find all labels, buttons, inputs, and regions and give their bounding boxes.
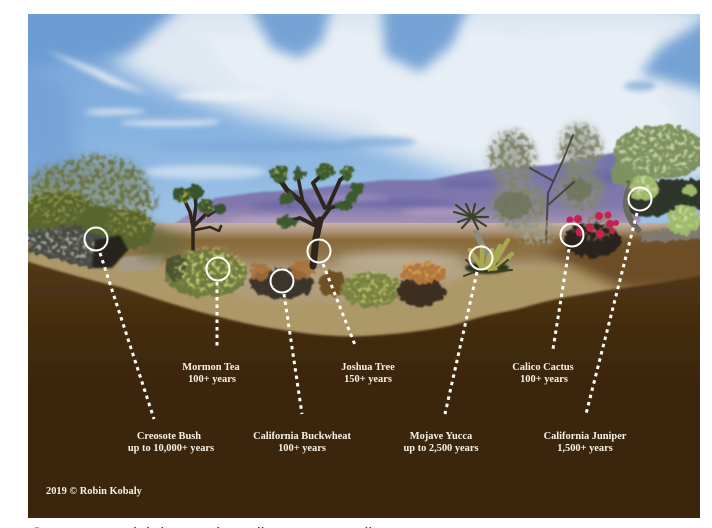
joshua tree (270, 163, 363, 266)
foreground shrubs (318, 261, 446, 307)
label: joshua tree: Joshua Tree (341, 362, 395, 373)
label: joshua tree: 150+ years (344, 374, 392, 385)
creosote bush (20, 155, 158, 268)
label: creosote bush: up to 10,000+ years (128, 443, 214, 454)
label: california buckwheat: 100+ years (278, 443, 326, 454)
marker: calico cactus (553, 224, 584, 349)
label: creosote bush: Creosote Bush (137, 431, 201, 442)
marker: mojave yucca (445, 246, 492, 414)
marker: creosote bush (84, 228, 154, 419)
label: california juniper: California Juniper (544, 431, 626, 442)
calico cactus (563, 212, 621, 257)
mojave yucca (454, 204, 512, 276)
marker: joshua tree (308, 240, 355, 345)
label: mojave yucca: Mojave Yucca (410, 431, 472, 442)
california buckwheat (249, 261, 315, 299)
label: calico cactus: Calico Cactus (512, 362, 574, 373)
label: calico cactus: 100+ years (520, 374, 568, 385)
marker: california juniper (586, 188, 652, 414)
small joshua tree (173, 185, 225, 253)
mormon tea (165, 248, 247, 297)
soil (10, 256, 712, 528)
california juniper (611, 125, 712, 243)
label: california buckwheat: California Buckwheat (253, 431, 351, 442)
desert floor (28, 222, 712, 345)
label: mormon tea: Mormon Tea (182, 362, 240, 373)
credit: 2019 © Robin Kobaly (46, 486, 143, 497)
sky (28, 14, 700, 240)
marker: mormon tea (206, 258, 230, 349)
label: california juniper: 1,500+ years (557, 443, 613, 454)
label: mojave yucca: up to 2,500 years (403, 443, 479, 454)
mountains (174, 152, 641, 223)
desert tree (488, 124, 604, 245)
marker: california buckwheat (270, 270, 302, 414)
label: mormon tea: 100+ years (188, 374, 236, 385)
